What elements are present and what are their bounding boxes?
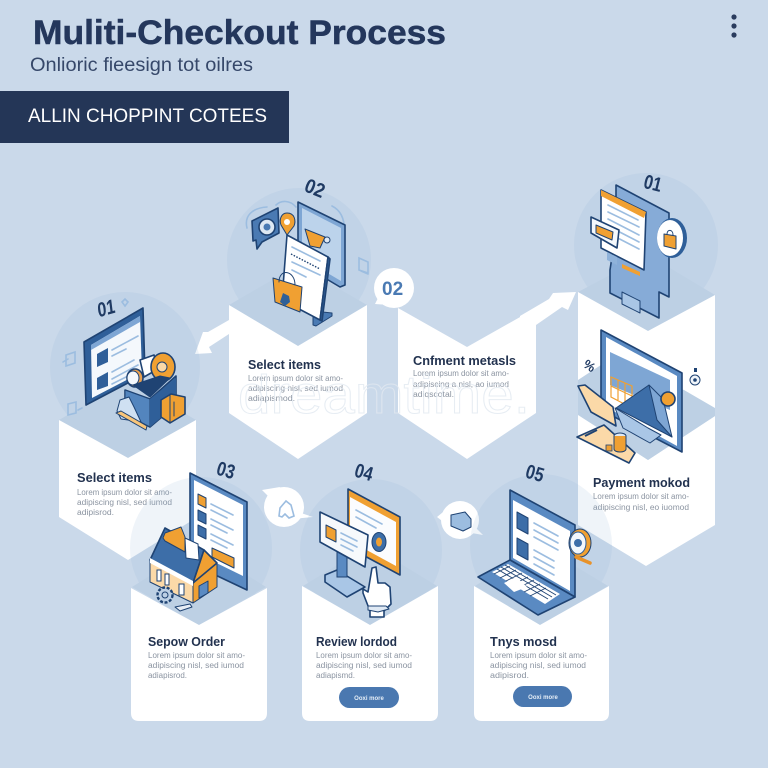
card xyxy=(131,588,267,721)
card xyxy=(59,420,196,560)
step number: 02 xyxy=(301,175,328,203)
icon: store window with parcels xyxy=(63,299,185,430)
panel: step 02 select items xyxy=(227,175,371,459)
diamond backdrop xyxy=(229,265,367,346)
card body: Lorem ipsum dolor sit amo- xyxy=(148,651,245,660)
card body: adiapismod. xyxy=(248,394,295,403)
card body xyxy=(490,651,587,680)
card body xyxy=(148,651,245,680)
title: Muliti-Checkout Process xyxy=(33,14,446,52)
card heading: Select items xyxy=(77,470,152,485)
panel: step 01 top right xyxy=(574,171,718,450)
card body: Lorem ipsum dolor sit amo- xyxy=(593,492,689,501)
card xyxy=(578,414,715,566)
card body xyxy=(413,369,509,399)
arrow: confirm to top right step xyxy=(520,292,576,330)
card xyxy=(229,305,367,459)
card body: adipiscing nisl, sed iumod xyxy=(77,498,172,507)
diamond backdrop xyxy=(303,545,437,625)
card heading: Tnys mosd xyxy=(490,634,557,649)
card body xyxy=(248,374,343,403)
icon: review screens with hand xyxy=(320,489,400,617)
icon: payment monitor: % xyxy=(581,356,599,375)
bubble: bag icon xyxy=(437,501,483,539)
card heading: Sepow Order xyxy=(148,634,225,649)
card xyxy=(578,292,715,450)
step number: 01 xyxy=(95,296,118,322)
card body: adipisrod. xyxy=(77,508,114,517)
panel: payment method xyxy=(577,330,715,566)
diamond backdrop xyxy=(59,380,196,458)
diamond backdrop xyxy=(475,545,608,625)
step halo xyxy=(300,479,442,621)
button: Ooxi more xyxy=(528,695,558,701)
card body: Lorem ipsum dolor sit amo- xyxy=(316,651,412,660)
card body: adiqscotal. xyxy=(413,390,454,399)
button: Ooxi more xyxy=(354,696,384,702)
watermark: dreamtime. xyxy=(238,365,530,425)
step number: 03 xyxy=(214,458,237,484)
icon: payment monitor xyxy=(577,330,700,463)
step halo xyxy=(50,292,200,442)
step halo xyxy=(130,477,272,619)
card body: Lorem ipsum dolor sit amo- xyxy=(490,651,587,660)
card body: adipiscing nisl, sed iumod xyxy=(316,661,412,670)
icon: shopping monitor xyxy=(246,201,368,326)
card xyxy=(302,586,438,721)
banner xyxy=(0,91,289,143)
bubble: 02: 02 xyxy=(382,279,403,300)
panel: step 03 xyxy=(130,458,272,721)
bubble: 02 xyxy=(374,268,414,308)
panel: step 01 left xyxy=(50,292,200,560)
card heading: Cnfment metasls xyxy=(413,353,516,368)
diamond backdrop xyxy=(132,545,266,625)
step number: 01 xyxy=(641,171,664,197)
step number: 05 xyxy=(523,461,546,487)
diamond backdrop xyxy=(578,365,715,460)
bubble: route icon xyxy=(262,487,313,527)
card body: adipiscing nisl, sed iumod xyxy=(148,661,244,670)
subtitle: Onlioric fieesign tot oilres xyxy=(30,55,253,76)
card body: adipiscing nisl, sed iumod xyxy=(490,661,586,670)
card xyxy=(474,586,609,721)
card body: Lorem ipsum dolor sit amo- xyxy=(248,374,343,383)
card heading: Select items xyxy=(248,357,321,372)
step halo xyxy=(470,474,612,616)
card body: adipiscing a nisl, ao iumod xyxy=(413,380,509,389)
card body: Lorem ipsum dolor sit amo- xyxy=(413,369,509,378)
card body: Lorem ipsum dolor sit amo- xyxy=(77,488,172,497)
card heading: Review lordod xyxy=(316,634,397,649)
card body xyxy=(77,488,172,517)
icon: laptop with magnifier xyxy=(478,490,591,615)
panel: confirm metals xyxy=(398,308,536,459)
arrow: step 02 to step 01 xyxy=(195,320,229,354)
step halo xyxy=(227,188,371,332)
icon: tablet and house xyxy=(150,473,247,611)
card xyxy=(398,308,536,459)
menu icon xyxy=(731,14,737,38)
panel: step 04 xyxy=(300,460,442,721)
card body: adipiscing nisl, sed iumod xyxy=(248,384,343,393)
icon: phone with document xyxy=(591,185,687,318)
diamond backdrop xyxy=(578,255,715,331)
card body: adipiscing nisl, eo iuomod xyxy=(593,503,689,512)
card body: adiapismd. xyxy=(316,671,355,680)
card body xyxy=(316,651,412,680)
banner: ALLIN CHOPPINT COTEES xyxy=(28,106,267,127)
card body: adiapisrod. xyxy=(148,671,187,680)
card body: adipisrod. xyxy=(490,671,529,680)
step number: 04 xyxy=(352,460,376,486)
card body xyxy=(593,492,689,512)
step halo xyxy=(574,173,718,317)
button xyxy=(339,687,399,708)
panel: step 05 xyxy=(470,461,612,721)
button xyxy=(513,686,572,707)
card heading: Payment mokod xyxy=(593,475,690,490)
